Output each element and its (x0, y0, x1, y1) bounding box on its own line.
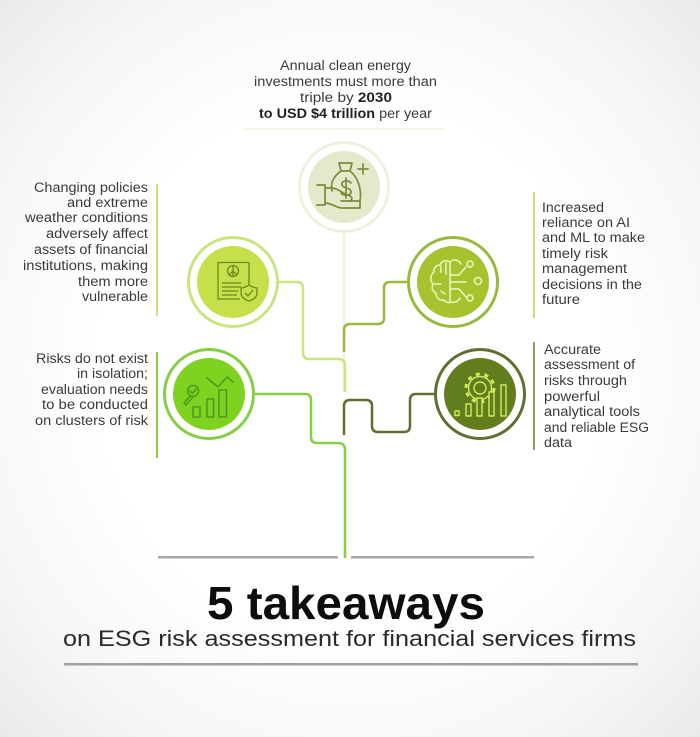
base rule: right (351, 556, 534, 558)
divider: under top text (245, 128, 445, 130)
text: clusters of risk: Risks do not exist (36, 351, 148, 366)
text: AI and ML: Increased (542, 200, 604, 215)
icon: gear and bar chart (436, 350, 524, 438)
text: clean energy investment: Annual clean energy (280, 58, 411, 73)
text: AI and ML: future (542, 292, 580, 307)
base rule: left (158, 556, 338, 558)
panel: analytical tools (436, 342, 649, 450)
text: AI and ML: decisions in the (542, 277, 642, 292)
text: changing policies: institutions, making (23, 258, 148, 273)
text: analytical tools: data (544, 435, 573, 450)
text: clusters of risk: evaluation needs (41, 382, 148, 397)
connector: AI circle to trunk (344, 282, 408, 352)
text: changing policies: and extreme (67, 195, 148, 210)
text: changing policies: them more (78, 274, 148, 289)
text: clusters of risk: in isolation; (77, 366, 148, 381)
text: changing policies: vulnerable (82, 289, 148, 304)
text: AI and ML: and ML to make (542, 230, 645, 245)
text: clean energy investment: triple by 2030 (300, 90, 392, 105)
side rule: analytical tools (533, 342, 535, 450)
text: analytical tools: analytical tools (544, 404, 640, 419)
icon: AI brain (408, 238, 498, 326)
text: clean energy investment: investments must more than (254, 74, 437, 89)
subtitle: on ESG risk assessment for financial services firms (63, 626, 636, 651)
text: analytical tools: assessment of (544, 357, 635, 372)
side rule: AI and ML (533, 192, 535, 318)
connector: risk clusters circle to base (255, 394, 345, 558)
text: AI and ML: timely risk (542, 246, 608, 261)
bottom rule (64, 663, 638, 666)
connector: analytics circle to trunk (344, 394, 435, 435)
text: clean energy investment: to USD $4 trillion per year (259, 106, 433, 121)
text: clean energy investment (254, 58, 437, 121)
text: analytical tools: risks through (544, 373, 627, 388)
icon: policy document with shield (188, 238, 278, 326)
text: analytical tools: and reliable ESG (544, 420, 649, 435)
text: changing policies: Changing policies (34, 180, 148, 195)
text: AI and ML (542, 200, 645, 307)
text: changing policies: weather conditions (24, 210, 148, 225)
text: changing policies: adversely affect (46, 226, 148, 241)
panel: AI and ML (408, 192, 645, 326)
text: analytical tools (544, 342, 649, 450)
text: AI and ML: reliance on AI (542, 215, 630, 230)
text: analytical tools: Accurate (544, 342, 601, 357)
panel: changing policies (23, 180, 278, 326)
icon: magnifier and bar chart (164, 350, 254, 438)
panel: clean energy investment (245, 58, 445, 232)
icon: money bag in hand (300, 142, 388, 232)
side rule: clusters of risk (156, 352, 158, 458)
text: changing policies (23, 180, 148, 304)
text: clusters of risk: to be conducted (42, 397, 148, 412)
text: clusters of risk: on clusters of risk (35, 413, 148, 428)
text: changing policies: assets of financial (34, 242, 148, 257)
text: AI and ML: management (542, 261, 627, 276)
text: analytical tools: powerful (544, 389, 600, 404)
text: clusters of risk (35, 351, 148, 428)
panel: clusters of risk (35, 350, 254, 458)
connector: top trunk line (343, 232, 345, 392)
title: 5 takeaways (207, 577, 485, 629)
connector: policy circle to trunk (279, 282, 345, 392)
side rule: changing policies (156, 184, 158, 316)
